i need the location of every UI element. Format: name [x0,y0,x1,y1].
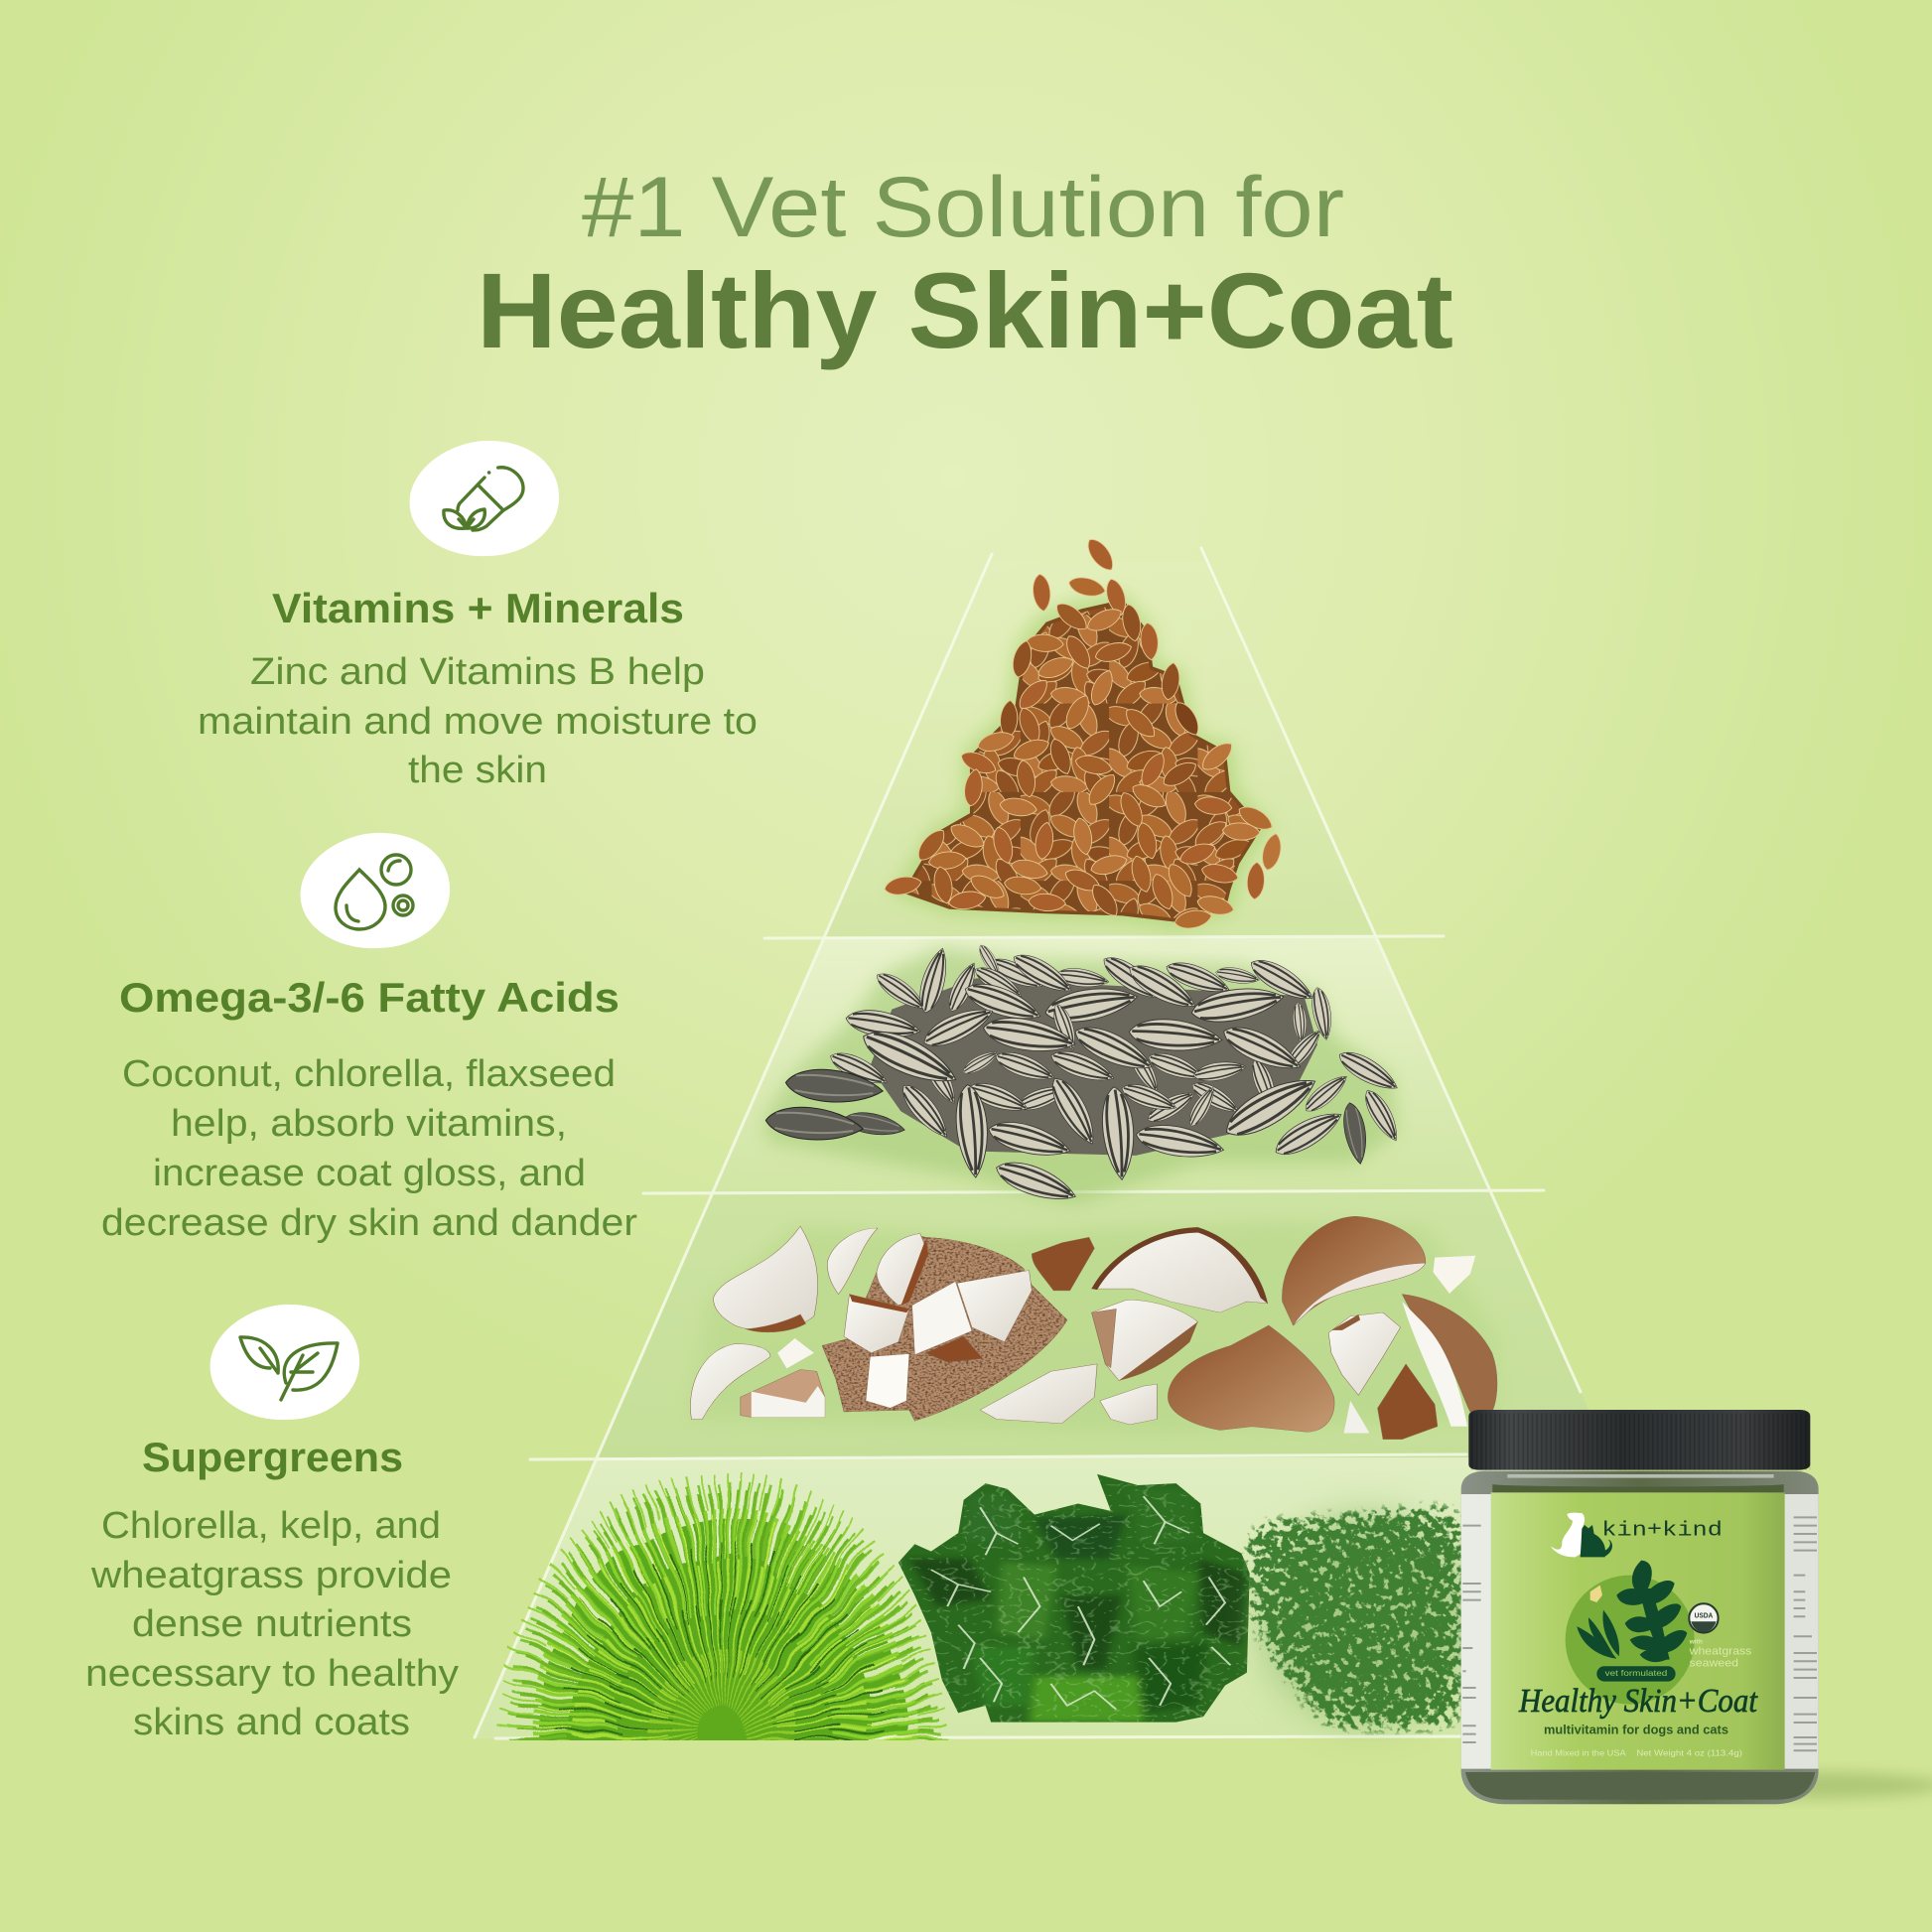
tier 4: green powder [1241,1499,1469,1732]
text: supergreens description: necessary to healthy [85,1653,459,1695]
green front label [1491,1492,1785,1770]
icon: droplet and bubbles [301,833,450,948]
text: omega description: increase coat gloss, and [153,1153,586,1194]
label text: with wheatgrass seaweed [1689,1639,1752,1670]
title [477,160,1453,370]
text: supergreens description: skins and coats [133,1702,410,1743]
text: vitamins description: maintain and move moisture to [198,701,758,743]
label artwork: kelp and grass [1566,1561,1695,1705]
heading: omega: Omega-3/-6 Fatty Acids [119,974,620,1021]
ingredient: supergreens [85,1305,459,1743]
pill text: vet formulated [1605,1669,1667,1678]
text: vitamins description: Zinc and Vitamins B help [250,651,705,693]
product name: Healthy Skin+Coat [1518,1683,1758,1720]
product fine print: Hand Mixed in the USA [1531,1747,1626,1757]
ingredient: omega fatty acids [101,833,637,1244]
text: omega description: Coconut, chlorella, flaxseed [122,1053,616,1095]
text: supergreens description: wheatgrass provide [90,1555,452,1596]
icon: capsule with leaves [410,441,559,556]
tier 4: wheatgrass [496,1471,949,1740]
label text: with wheatgrass seaweed: wheatgrass [1689,1646,1752,1658]
product jar [1461,1410,1932,1804]
heading: vitamins + minerals: Vitamins + Minerals [272,585,684,631]
pyramid diagram [473,539,1616,1740]
text: vitamins description [198,651,758,791]
text: vitamins description: the skin [408,750,547,791]
label text: with wheatgrass seaweed: seaweed [1690,1658,1738,1670]
pyramid outline [475,548,1581,1738]
tier 4: kelp seaweed [893,1470,1258,1727]
badge: USDA organic: USDA [1695,1610,1714,1619]
text: omega description: help, absorb vitamins, [171,1103,567,1145]
jar lid [1468,1410,1810,1470]
product fine print: Net Weight 4 oz (113.4g) [1636,1748,1742,1758]
pyramid tier backgrounds [475,562,1737,1738]
title: Healthy Skin+Coat [477,250,1453,370]
logo: dog and cat [1551,1513,1612,1557]
brand name: kin+kind [1601,1520,1723,1543]
product subtitle: multivitamin for dogs and cats [1544,1724,1728,1737]
text: supergreens description: dense nutrients [132,1603,412,1645]
text: supergreens description: Chlorella, kelp, and [101,1505,441,1547]
jar shadow [1678,1772,1932,1799]
text: omega description [101,1053,637,1244]
tier 2: sunflower seeds [763,942,1405,1209]
tier 1: flaxseed pile [884,534,1285,931]
tier 3: coconut pieces [690,1216,1497,1440]
title: #1 Vet Solution for [582,160,1344,255]
text: supergreens description [85,1505,459,1743]
ingredient: vitamins and minerals [198,441,758,791]
jar glass body [1461,1471,1819,1804]
white side labels [1461,1494,1819,1769]
heading: supergreens: Supergreens [142,1434,403,1480]
label text: with wheatgrass seaweed: with [1689,1639,1703,1646]
product fine print [1531,1747,1742,1758]
badge: USDA organic [1689,1603,1719,1633]
icon: leaves [210,1305,359,1420]
text: omega description: decrease dry skin and dander [101,1202,637,1244]
